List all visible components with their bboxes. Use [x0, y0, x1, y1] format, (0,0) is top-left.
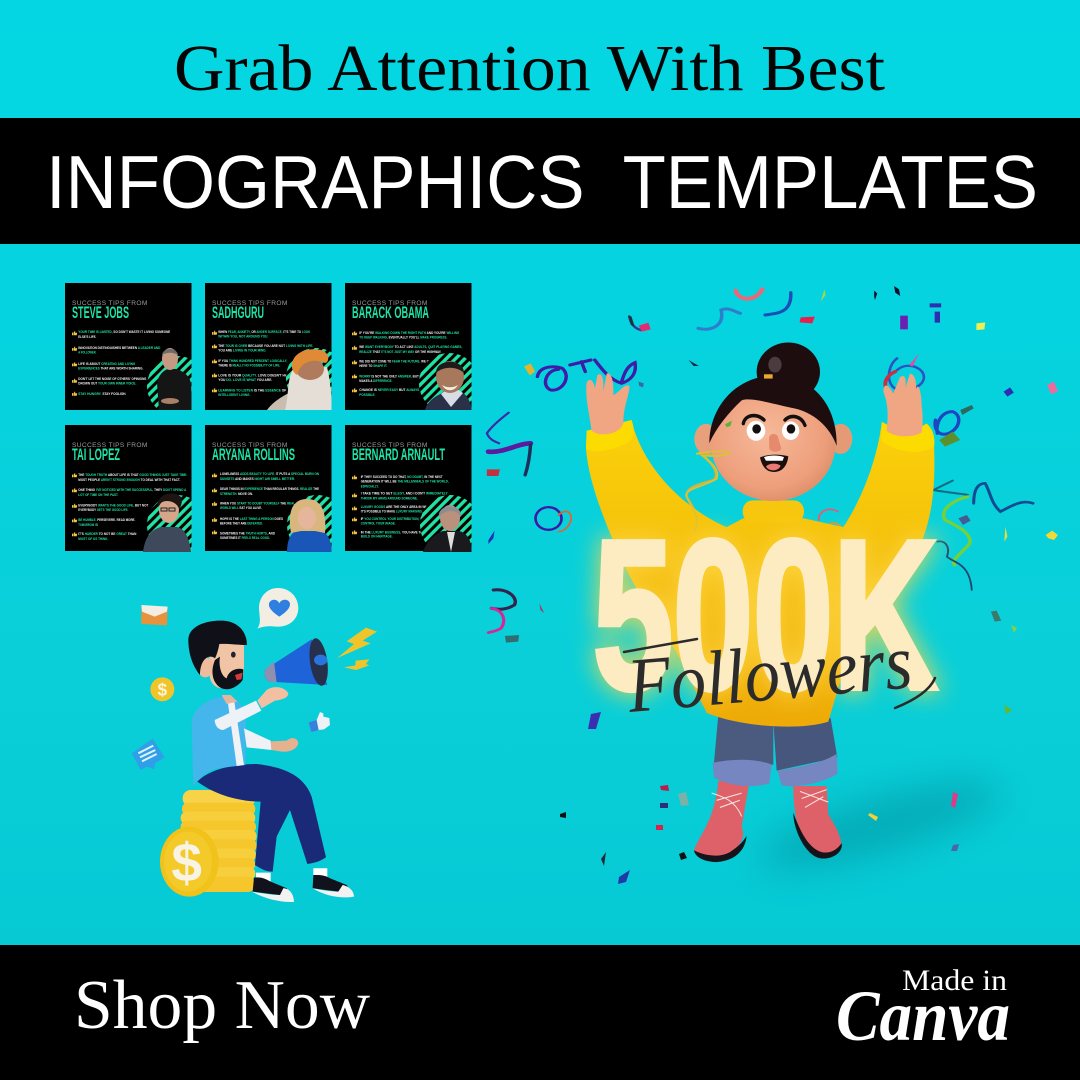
panel: Tai Lopez success tips card: BE HUMBLE. PERSEVERE. READ MORE. [78, 518, 135, 522]
icon: heart speech bubble [257, 588, 298, 629]
panel: Sadhguru success tips card: YOU DO. LOVE IS WHAT YOU ARE. [218, 378, 272, 382]
big dollar coin: $ [171, 832, 202, 894]
banner: infographics templates [0, 118, 1080, 244]
panel: Sadhguru success tips card: THE TOUR IS OVER BECAUSE YOU ARE NOT LIVING WITH LIFE. [218, 344, 313, 348]
panel: Steve Jobs success tips card: YOUR TIME IS LIMITED, SO DON'T WASTE IT LIVING SOMEONE [78, 330, 171, 334]
confetti: lower paper [560, 625, 1017, 884]
icon: thumbs up [309, 712, 330, 732]
panel: Steve Jobs success tips card: DROWN OUT YOUR OWN INNER VOICE. [78, 382, 136, 386]
panel: Sadhguru success tips card: IF YOU THINK HUNDRED PERCENT LOGICALLY, [218, 359, 287, 363]
shirt [192, 696, 246, 786]
panel: Sadhguru success tips card: WITHIN YOU, NOT AROUND YOU. [218, 334, 268, 338]
head [188, 621, 247, 704]
panel: Sadhguru success tips card [205, 283, 332, 410]
panel: Sadhguru success tips card: SADHGURU [212, 304, 264, 322]
panel: Bernard Arnault success tips card: ESPECIALLY. [361, 484, 379, 488]
panel: Aryana Rollins success tips card: SOMETIMES IT FEELS REAL GOOD. [220, 536, 270, 540]
panel: Bernard Arnault success tips card: IN THE LUXURY BUSINESS, YOU HAVE TO [361, 530, 423, 534]
panel: Bernard Arnault success tips card: LUXURY GOODS ARE THE ONLY AREA IN WHICH [361, 505, 433, 509]
icon: envelope [141, 605, 168, 625]
panel: Steve Jobs success tips card: DON'T LET THE NOISE OF OTHERS' OPINIONS [78, 377, 147, 381]
panel: Steve Jobs success tips card: SUCCESS TIPS FROM [72, 300, 148, 307]
panel: Barack Obama success tips card [345, 283, 479, 413]
panel: Bernard Arnault success tips card: IF YOU CONTROL YOUR DISTRIBUTION, YOU [361, 517, 427, 521]
panel: Sadhguru success tips card: LEARNING TO LISTEN IS THE ESSENCE OF [218, 388, 286, 392]
panel: Barack Obama success tips card: MAKES A DIFFERENCE. [359, 379, 392, 383]
panel: Tai Lopez success tips card: SUCCESS TIPS FROM [72, 442, 148, 449]
panel: Bernard Arnault success tips card: IF THEY SUCCEED TO DO THAT, NO DOUBT, IN THE NEXT [361, 475, 444, 479]
shorts with rolled cuffs [713, 715, 838, 786]
illustration: woman celebrating [586, 342, 934, 862]
heading: Grab Attention With Best: Grab Attention With Best [174, 32, 885, 105]
panel: Barack Obama success tips card: HERE TO SHAPE IT. [359, 364, 388, 368]
stack of coins [181, 790, 257, 892]
panel: Bernard Arnault success tips card: IT'S POSSIBLE TO MAKE LUXURY MARGINS. [361, 509, 423, 513]
panel: Tai Lopez success tips card: TOMORROW IS! [78, 523, 98, 527]
call to action: Shop Now: Shop Now [74, 967, 370, 1044]
panel: Sadhguru success tips card: INTELLIGENT LIVING. [218, 393, 250, 397]
panel: Tai Lopez success tips card: THE TOUGH TRUTH ABOUT LIFE IS THAT GOOD THINGS JUST TAKE TIME. [78, 473, 187, 477]
icon: chat bubble [132, 739, 165, 770]
panel: Barack Obama success tips card: BARACK OBAMA [352, 304, 429, 322]
boots [694, 781, 842, 862]
panel: Sadhguru success tips card: WHEN FEAR, ANXIETY, OR ANGER SURFACE, IT'S TIME TO LOOK [218, 330, 311, 334]
icon: dollar coin [150, 677, 174, 701]
panel: Aryana Rollins success tips card: WORLD WILL EAT YOU ALIVE. [220, 506, 262, 510]
confetti: upper ribbons and paper [487, 286, 1058, 643]
badge: Made in Canva: Canva [836, 976, 1010, 1056]
panel: Aryana Rollins success tips card [205, 425, 332, 552]
panel: Bernard Arnault success tips card: BERNARD ARNAULT [352, 446, 445, 464]
badge: Made in Canva: Made in [902, 964, 1007, 997]
panel: Bernard Arnault success tips card [345, 425, 480, 555]
illustration: man with megaphone on coins [132, 588, 377, 902]
panel: Aryana Rollins success tips card: LONELINESS ADDS BEAUTY TO LIFE. IT PUTS A SPECIAL BURN ON [220, 472, 319, 476]
arms [215, 687, 298, 752]
panel: Steve Jobs success tips card: ELSE'S LIFE. [78, 335, 96, 339]
panel: Barack Obama success tips card: POSSIBLE. [359, 393, 375, 397]
panel: Tai Lopez success tips card: MOST PEOPLE AREN'T STRONG ENOUGH TO DEAL WITH THAT FACT. [78, 478, 181, 482]
panel: Steve Jobs success tips card [65, 283, 192, 410]
megaphone [264, 637, 331, 687]
panel: Aryana Rollins success tips card: BEFORE THEY ARE DEFEATED. [220, 522, 263, 526]
banner: infographics templates: INFOGRAPHICS TEMPLATES [46, 140, 1038, 224]
panel: Aryana Rollins success tips card: ARYANA ROLLINS [212, 446, 295, 464]
decorative shadow under woman [752, 764, 1008, 886]
panel: Steve Jobs success tips card: STEVE JOBS [72, 304, 129, 322]
shoes [252, 868, 354, 902]
panel: Sadhguru success tips card: THERE IS REALLY NO POSSIBILITY OF LIFE. [218, 364, 280, 368]
hands [586, 373, 923, 436]
panel: Sadhguru success tips card: YOU ARE LIVING IN YOUR MIND. [218, 349, 266, 353]
panel: Steve Jobs success tips card: INNOVATION DISTINGUISHES BETWEEN A LEADER AND [78, 346, 161, 350]
panel: Tai Lopez success tips card: IT'S HARDER TO NOT BE GREAT THAN [78, 532, 137, 536]
panel: Tai Lopez success tips card: ONE THING I'VE NOTICED WITH THE SUCCESSFUL, THEY DON'T SPEND A [78, 488, 187, 492]
panel: Aryana Rollins success tips card: SUNSETS AND MAKES NIGHT AIR SMELL BETTER. [220, 477, 295, 481]
panel: Tai Lopez success tips card: TAI LOPEZ [72, 446, 120, 464]
panel: Bernard Arnault success tips card: THROW MY ARMS AROUND SOMEONE. [361, 496, 418, 500]
panel: Barack Obama success tips card: WORRY IS NOT THE ONLY ANSWER, BUT IT [359, 374, 423, 378]
sweater [586, 422, 934, 727]
panel: Sadhguru success tips card: LOVE IS YOUR QUALITY. LOVE DOESN'T HAVE [218, 374, 292, 378]
panel: Steve Jobs success tips card: STAY HUNGRY. STAY FOOLISH. [78, 392, 126, 396]
panel: Barack Obama success tips card: TO KEEP WALKING, EVENTUALLY YOU'LL MAKE PROGRESS. [359, 335, 447, 339]
panel: Steve Jobs success tips card: LIFE IS ABOUT CREATING AND LIVING [78, 362, 136, 366]
panel: Aryana Rollins success tips card: SOMETIMES THE TRUTH HURTS, AND [220, 532, 275, 536]
panel: Barack Obama success tips card: SUCCESS TIPS FROM [352, 300, 428, 307]
panel: Tai Lopez success tips card: EVERYBODY GETS THE GOOD LIFE. [78, 508, 128, 512]
panel: Barack Obama success tips card: IF YOU'RE WALKING DOWN THE RIGHT PATH AND YOU'RE WILLING [359, 331, 460, 335]
panel: Barack Obama success tips card: WE WANT EVERYBODY TO ACT LIKE ADULTS, QUIT PLAYING GAMES, [359, 345, 462, 349]
script word Followers: Followers [623, 617, 915, 729]
panel: Steve Jobs success tips card: EXPERIENCES THAT ARE WORTH SHARING. [78, 367, 143, 371]
legs [197, 764, 326, 872]
panel: Bernard Arnault success tips card: SUCCESS TIPS FROM [352, 442, 428, 449]
footer bar [0, 945, 1080, 1080]
panel: Bernard Arnault success tips card: I TAKE TIME TO GET ELEGY, AND I DON'T IMMEDIATELY [361, 492, 448, 496]
neck roll [743, 500, 804, 522]
panel: Tai Lopez success tips card: LOT OF TIME ON THE PAST. [78, 493, 119, 497]
panel: Bernard Arnault success tips card: BUILD ON HERITAGE. [361, 535, 393, 539]
panel: Barack Obama success tips card: REALIZE THAT IT'S NOT JUST MY WAY OR THE HIGHWAY. [359, 350, 441, 354]
big dollar coin [160, 827, 219, 897]
panel: Steve Jobs success tips card: A FOLLOWER. [78, 351, 96, 355]
panel: Aryana Rollins success tips card: SUCCESS TIPS FROM [212, 442, 288, 449]
panel: Aryana Rollins success tips card: HOPE IS THE LAST THING A PERSON DOES [220, 517, 284, 521]
panel: Bernard Arnault success tips card: GENERATION IT WILL BE THE MILLENNIALS OF THE WORLD, [361, 480, 449, 484]
ribbon on woman [686, 451, 730, 532]
panel: Bernard Arnault success tips card: CONTROL YOUR IMAGE. [361, 522, 396, 526]
panel: Sadhguru success tips card: SUCCESS TIPS FROM [212, 300, 288, 307]
panel: Barack Obama success tips card: CHANGE IS NEVER EASY BUT ALWAYS [359, 388, 420, 392]
panel: Aryana Rollins success tips card: DEAR THINGS IN EXPERIENCE THAN REGULAR THINGS. REALIZE THE [220, 487, 320, 491]
panel: Tai Lopez success tips card: MOST OF US THINK. [78, 537, 108, 541]
panel: Aryana Rollins success tips card: STRENGTH. MOVE ON. [220, 492, 253, 496]
icon: dollar coin: $ [158, 680, 168, 700]
panel: Tai Lopez success tips card: EVERYBODY WANTS THE GOOD LIFE, BUT NOT [78, 504, 149, 508]
icon: lightning bolts [337, 628, 377, 670]
sleeve cuffs [586, 420, 934, 452]
panel: Barack Obama success tips card: WE DID NOT COME TO FEAR THE FUTURE. WE CAME [359, 360, 436, 364]
head [694, 342, 852, 501]
panel: Tai Lopez success tips card [65, 425, 192, 552]
panel: Aryana Rollins success tips card: WHEN YOU START TO DOUBT YOURSELF THE REAL [220, 502, 295, 506]
